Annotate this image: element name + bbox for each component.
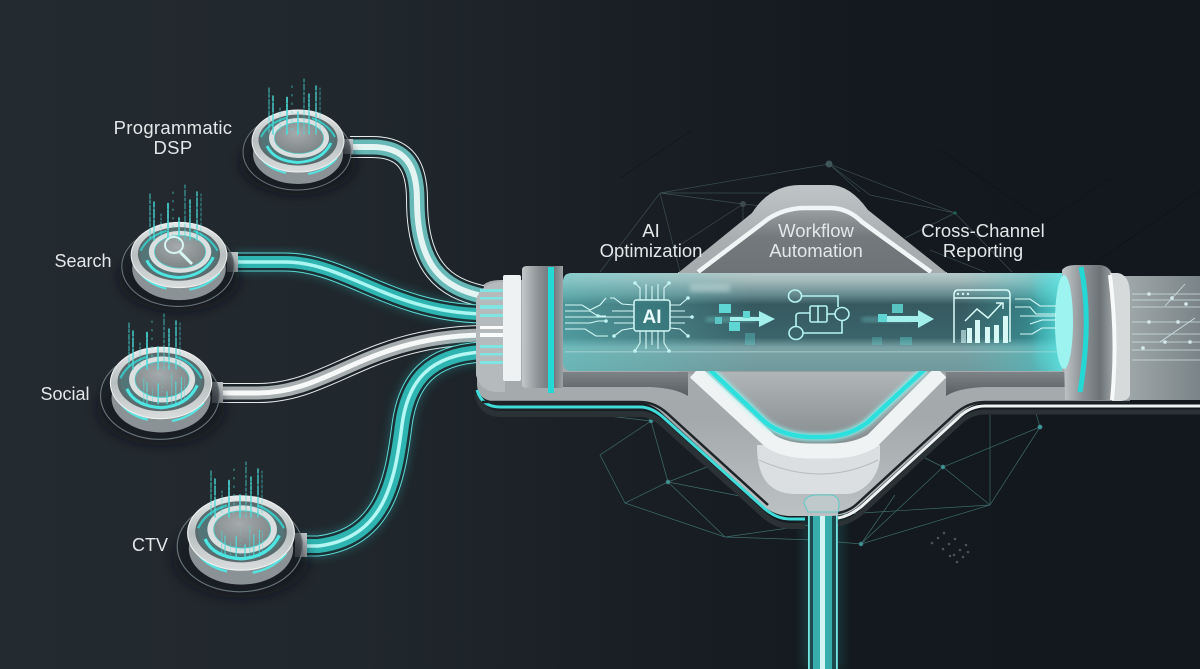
label: social: Social [40, 384, 90, 404]
diamond panel [678, 185, 947, 374]
icon: AI chip [565, 281, 694, 353]
left collar [522, 266, 563, 393]
right collar [1062, 265, 1130, 401]
arrow 2 with data squares [862, 304, 934, 345]
node: programmatic [240, 78, 356, 195]
plate white lip [838, 406, 1200, 518]
label: ai optimization: Optimization [600, 240, 702, 261]
white and cyan V [695, 369, 941, 451]
arrow 1 with data squares [706, 304, 775, 345]
label: workflow automation: Workflow [778, 220, 854, 241]
dot grid [931, 532, 969, 563]
bottom bump and port [757, 445, 880, 512]
white chevron top [698, 208, 931, 272]
network lines lower [600, 410, 1042, 546]
icon: reporting chart [954, 290, 1056, 343]
node: search [119, 184, 239, 312]
label: programmatic dsp: DSP [154, 137, 192, 158]
under tube panel [695, 372, 942, 456]
icon: AI chip: AI [642, 307, 662, 328]
output tube [802, 500, 844, 669]
node: social [97, 313, 225, 445]
network lines upper [600, 160, 1012, 272]
glass tube [563, 273, 1073, 371]
label: search: Search [54, 251, 112, 271]
label: programmatic dsp: Programmatic [114, 117, 232, 138]
label: ctv: CTV [132, 535, 168, 555]
label: cross-channel reporting: Reporting [943, 240, 1023, 261]
diamond inner shading [697, 208, 930, 273]
label: workflow automation: Automation [769, 240, 863, 261]
left nozzle [476, 275, 521, 392]
tube: social [215, 335, 482, 393]
node: ctv [174, 461, 308, 598]
plate shelf [563, 372, 1065, 396]
tube: programmatic [350, 147, 482, 296]
plate cyan lip [477, 390, 805, 519]
label: cross-channel reporting: Cross-Channel [921, 220, 1045, 241]
tube: search [235, 262, 482, 314]
tube: ctv [300, 352, 482, 546]
label: ai optimization: AI [642, 220, 660, 241]
icon: workflow [788, 290, 849, 340]
icon: magnifier [165, 237, 192, 264]
right circuit band [1125, 276, 1200, 400]
metal plate [477, 185, 1200, 526]
